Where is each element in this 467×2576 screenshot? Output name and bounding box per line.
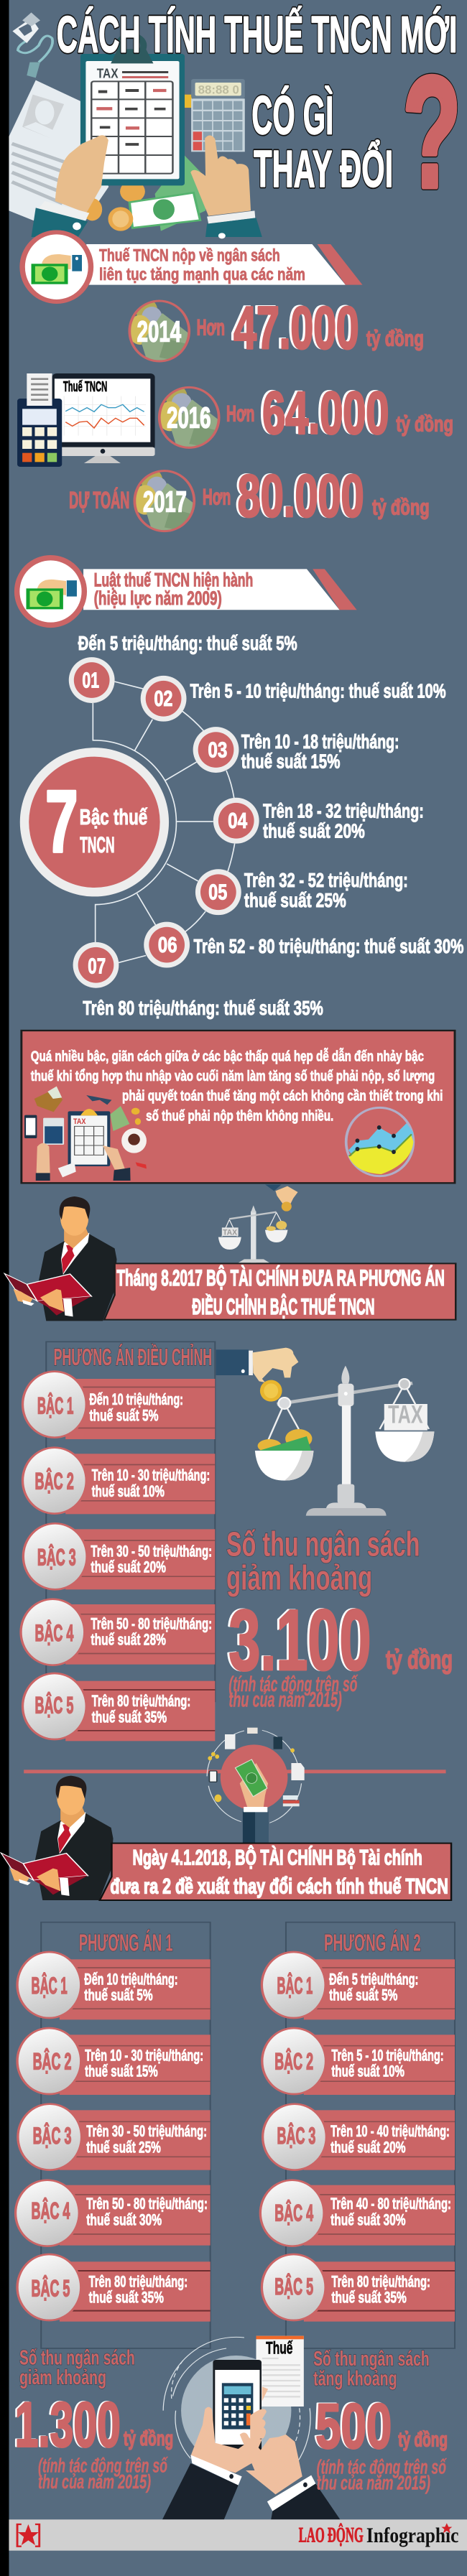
option 2 row 5: thuế suất 35% xyxy=(331,2289,407,2307)
logo: star in brackets xyxy=(17,2524,40,2547)
callout: option 2 revenue xyxy=(313,2347,448,2494)
icon: left hand xyxy=(32,135,108,237)
row: bậc 5 xyxy=(23,1673,215,1741)
option 2 row 2 xyxy=(262,2028,455,2095)
option 2 row 5 xyxy=(262,2254,455,2322)
option 1 row 1: Đến 10 triệu/tháng: xyxy=(84,1971,177,1989)
figure: businessman with book xyxy=(4,1196,116,1321)
row: bậc 1: thuế suất 5% xyxy=(89,1408,159,1425)
row: bậc 1: BẬC 1 xyxy=(37,1392,73,1418)
callout: option 1 revenue: 1.300 xyxy=(13,2389,119,2460)
row: bậc 2: Trên 10 - 30 triệu/tháng: xyxy=(92,1467,210,1484)
icon: hand holding banknote in ring xyxy=(207,1728,305,1843)
commentary text: số thuế phải nộp thêm không nhiều. xyxy=(146,1107,333,1124)
icon: hands with phone calculator and tax paper: Thuế xyxy=(266,2338,293,2358)
option 2 row 3 xyxy=(263,2104,455,2170)
option 2 row 3: thuế suất 20% xyxy=(330,2139,406,2157)
left black strip xyxy=(0,0,9,2576)
row: bậc 3: Trên 30 - 50 triệu/tháng: xyxy=(91,1543,212,1561)
icon: balance scale with hand and coin xyxy=(216,1348,434,1516)
option 1 row 5: Trên 80 triệu/tháng: xyxy=(89,2274,188,2291)
option 1 row 3: BẬC 3 xyxy=(33,2122,71,2149)
option 2 row 2: BẬC 2 xyxy=(274,2048,313,2075)
option 1 row 4: thuế suất 30% xyxy=(86,2212,162,2229)
row: bậc 3 xyxy=(23,1523,215,1589)
section: two options xyxy=(16,1922,455,2348)
node 07 xyxy=(73,942,119,988)
subtitle: có gì xyxy=(251,85,333,146)
callout: option 1 revenue: (tính tác động trên số xyxy=(38,2454,168,2477)
icon: tax clipboard: TAX xyxy=(97,67,119,81)
node 01: 01 xyxy=(82,669,99,692)
node 03 xyxy=(193,727,239,773)
option 1 row 3: Trên 30 - 50 triệu/tháng: xyxy=(86,2123,207,2140)
section: current law seven tax brackets xyxy=(17,558,463,1019)
icon: calculator xyxy=(185,79,245,152)
central circle: 7 bậc thuế TNCN: Bậc thuế xyxy=(80,805,148,829)
option 2 row 1: BẬC 1 xyxy=(277,1972,313,1999)
option 1 row 4: Trên 50 - 80 triệu/tháng: xyxy=(86,2195,208,2213)
icon: balance scale with hand and coin: TAX xyxy=(388,1401,423,1429)
section header 2 xyxy=(17,558,357,625)
node 07: 07 xyxy=(88,954,106,978)
node 05: 05 xyxy=(208,881,227,905)
panel: phương án 1: PHƯƠNG ÁN 1 xyxy=(79,1930,172,1956)
callout: option 1 revenue: Số thu ngân sách xyxy=(19,2346,135,2369)
option 2 row 1: thuế suất 5% xyxy=(329,1987,397,2004)
node 04 xyxy=(213,798,259,844)
hero section xyxy=(9,6,461,238)
option 2 row 1 xyxy=(262,1952,455,2019)
row: bậc 1: Đến 10 triệu/tháng: xyxy=(89,1391,183,1408)
bracket labels: thuế suất 15% xyxy=(241,749,340,772)
option 1 row 2 xyxy=(17,2028,211,2095)
row: bậc 5: thuế suất 35% xyxy=(92,1709,167,1726)
stat: 2014: Hơn xyxy=(197,315,225,340)
bracket labels: Trên 80 triệu/tháng: thuế suất 35% xyxy=(83,996,323,1019)
central circle: 7 bậc thuế TNCN: TNCN xyxy=(80,832,115,857)
icon: small scale with hand xyxy=(218,1184,298,1263)
callout: option 1 revenue: thu của năm 2015) xyxy=(38,2470,151,2493)
banner: August 2017 xyxy=(104,1263,456,1320)
section header 1: Thuế TNCN nộp về ngân sách xyxy=(99,245,280,265)
icon: calculator: 88:88 0 xyxy=(198,83,239,96)
icon: dollar bills and coins xyxy=(83,156,205,231)
row: bậc 4: thuế suất 28% xyxy=(91,1632,166,1649)
stat: 2016 xyxy=(158,378,453,449)
icon: star xyxy=(441,2523,452,2533)
row: bậc 4 xyxy=(21,1599,215,1665)
node 04: 04 xyxy=(228,809,247,833)
option 2 row 4: thuế suất 30% xyxy=(330,2212,406,2229)
option 1 row 5 xyxy=(17,2254,211,2322)
icon: tax clipboard xyxy=(80,35,185,185)
banner: 4.1.2018 xyxy=(100,1843,451,1900)
hero section: CÓ GÌ xyxy=(251,85,333,146)
stat: dự toán 2017: 80.000 xyxy=(236,462,362,529)
stat: 2014 xyxy=(128,294,424,362)
row: bậc 4: Trên 50 - 80 triệu/tháng: xyxy=(91,1616,212,1633)
connector lines xyxy=(93,682,235,962)
node 06 xyxy=(144,922,190,968)
option 2 row 2: thuế suất 10% xyxy=(331,2063,404,2080)
row: bậc 2 xyxy=(23,1448,215,1514)
node 06: 06 xyxy=(158,934,177,957)
figure: businessman with book xyxy=(1,1776,114,1900)
row: bậc 5: BẬC 5 xyxy=(35,1692,73,1719)
option 1 row 4 xyxy=(16,2180,211,2246)
icon: hands with phone calculator and tax paper xyxy=(162,2336,340,2519)
row: bậc 2: BẬC 2 xyxy=(35,1467,74,1494)
section header 1 xyxy=(22,232,362,302)
section header 1: liên tục tăng mạnh qua các năm xyxy=(99,264,305,284)
divider line xyxy=(24,1770,446,1773)
row: bậc 3: BẬC 3 xyxy=(37,1543,76,1570)
stat: dự toán 2017: Hơn xyxy=(203,484,231,509)
stat: 2016: 2016 xyxy=(167,401,211,434)
section: adjusted scheme xyxy=(21,1342,453,1741)
bracket labels: thuế suất 25% xyxy=(244,888,346,911)
footer band: LAO ĐỘNG xyxy=(299,2523,364,2547)
panel: phương án 1 xyxy=(16,1922,211,2348)
row: bậc 4: BẬC 4 xyxy=(35,1619,74,1646)
icon: pos terminal and monitor xyxy=(17,373,155,467)
icon: right hand xyxy=(190,135,262,238)
icon: tax desk illustration xyxy=(24,1087,147,1181)
row: bậc 3: thuế suất 20% xyxy=(91,1559,166,1576)
section: January 2018 proposal xyxy=(1,1728,451,1900)
callout: option 2 revenue: tăng khoảng xyxy=(313,2367,397,2390)
hero section: CÓ GÌ xyxy=(251,85,333,146)
option 1 row 5: thuế suất 35% xyxy=(89,2289,164,2307)
bracket labels: Trên 32 - 52 triệu/tháng: xyxy=(244,868,408,891)
stat: 2014: 2014 xyxy=(137,315,181,348)
icon: tax desk illustration: TAX xyxy=(73,1116,86,1126)
node 03: 03 xyxy=(208,738,227,762)
section: revenue by year xyxy=(17,232,453,532)
option 2 row 4 xyxy=(260,2180,455,2246)
row: bậc 2: thuế suất 10% xyxy=(92,1483,165,1500)
bracket labels: Trên 10 - 18 triệu/tháng: xyxy=(241,730,399,753)
stat: 2014: tỷ đồng xyxy=(366,327,424,351)
stat: 2014: 47.000 xyxy=(234,294,359,361)
node 05 xyxy=(195,869,241,915)
callout: option 1 revenue: tỷ đồng xyxy=(124,2427,173,2450)
stat: dự toán 2017: 80.000 xyxy=(238,462,364,529)
callout: option 1 revenue xyxy=(13,2346,173,2493)
node 02 xyxy=(141,676,187,722)
callout: option 2 revenue: 500 xyxy=(314,2391,390,2461)
option 2 row 3: BẬC 3 xyxy=(277,2122,315,2149)
icon: pos terminal and monitor: Thuế TNCN xyxy=(63,378,107,394)
callout: option 2 revenue: 500 xyxy=(315,2391,392,2462)
icon: area chart circle xyxy=(346,1107,413,1176)
panel: commentary xyxy=(22,1031,455,1183)
option 1 row 2: thuế suất 15% xyxy=(85,2063,158,2080)
option 1 row 1 xyxy=(17,1952,211,2019)
stat: dự toán 2017 xyxy=(69,462,430,532)
subtitle: thay đổi xyxy=(254,140,393,198)
option 2 row 5: BẬC 5 xyxy=(274,2273,313,2300)
callout: option 1 revenue: 1.300 xyxy=(15,2390,121,2460)
callout: budget revenue falls xyxy=(226,1525,453,1712)
option 1 row 3 xyxy=(18,2104,211,2170)
icon: small scale with hand: TAX xyxy=(223,1227,237,1237)
section: adjusted scheme: PHƯƠNG ÁN ĐIỀU CHỈNH xyxy=(54,1344,212,1370)
section: commentary and August 2017 proposal xyxy=(4,1031,456,1321)
commentary text xyxy=(31,1047,443,1124)
option 1 row 1: thuế suất 5% xyxy=(84,1987,153,2004)
section header 2: Luật thuế TNCN hiện hành xyxy=(94,569,253,590)
option 1 row 4: BẬC 4 xyxy=(32,2197,70,2223)
row: bậc 5: Trên 80 triệu/tháng: xyxy=(92,1693,190,1710)
option 1 row 5: BẬC 5 xyxy=(32,2275,70,2302)
option 1 row 3: thuế suất 25% xyxy=(86,2139,161,2157)
bracket labels: thuế suất 20% xyxy=(263,819,365,842)
section header 2: (hiệu lực năm 2009) xyxy=(94,587,222,609)
panel: phương án 2 xyxy=(260,1922,455,2348)
callout: budget revenue falls: thu của năm 2015) xyxy=(228,1688,342,1712)
stat: dự toán 2017: DỰ TOÁN xyxy=(69,487,129,513)
row: bậc 1 xyxy=(23,1372,215,1439)
panel: phương án điều chỉnh xyxy=(21,1342,215,1741)
node 01 xyxy=(69,657,115,703)
document paper xyxy=(9,80,108,237)
footer band xyxy=(9,2519,467,2551)
node 02: 02 xyxy=(154,687,172,711)
option 1 row 1: BẬC 1 xyxy=(32,1972,68,1999)
option 1 row 2: Trên 10 - 30 triệu/tháng: xyxy=(85,2047,203,2065)
section: results and footer xyxy=(9,2336,467,2551)
option 1 row 2: BẬC 2 xyxy=(33,2048,71,2075)
option 2 row 4: BẬC 4 xyxy=(274,2200,313,2226)
bracket labels: Đến 5 triệu/tháng: thuế suất 5% xyxy=(78,631,297,654)
central circle: 7 bậc thuế TNCN xyxy=(20,748,169,896)
central circle: 7 bậc thuế TNCN: 7 xyxy=(45,772,78,870)
callout: option 1 revenue: giảm khoảng xyxy=(19,2366,106,2389)
stat: dự toán 2017: 2017 xyxy=(143,485,187,518)
icon: usb cable xyxy=(12,12,52,78)
bracket labels xyxy=(78,631,463,1019)
stat: 2016: Hơn xyxy=(226,401,254,427)
stat: 2014: 47.000 xyxy=(231,294,356,361)
